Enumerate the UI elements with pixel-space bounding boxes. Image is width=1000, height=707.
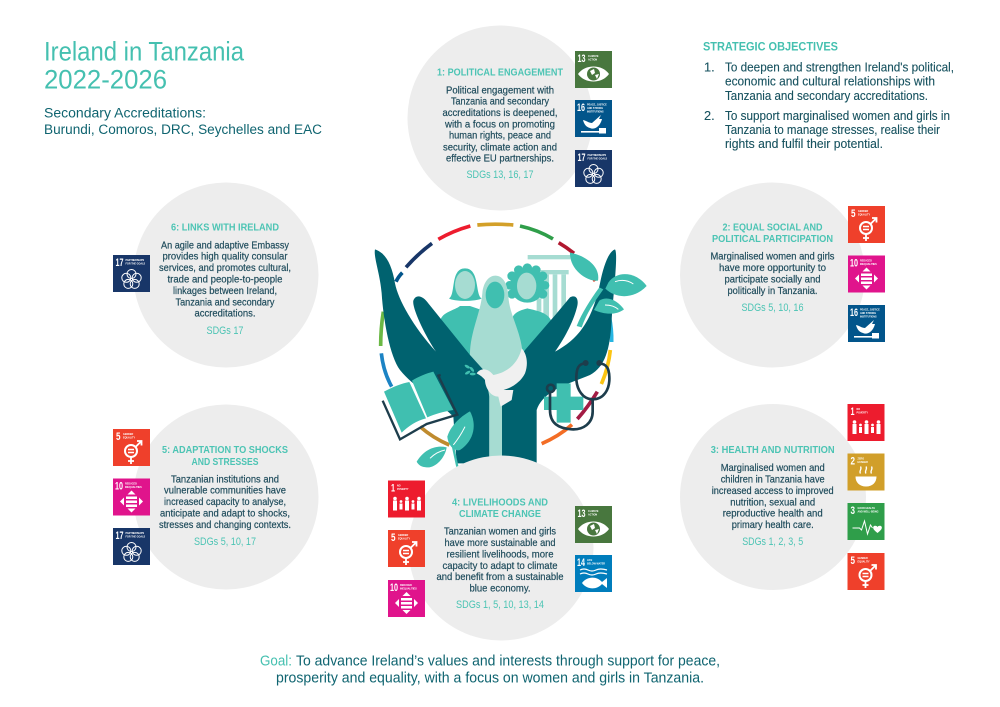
goal statement: prosperity and equality, with a focus on women and girls in Tanzania. xyxy=(276,671,704,687)
icon: SDG 16: 16 xyxy=(850,307,858,319)
objective 2: 2. xyxy=(704,108,715,123)
body text: children in Tanzania have xyxy=(721,474,825,486)
icon: SDG 10 xyxy=(113,478,150,516)
icon: SDG 10: INEQUALITIES xyxy=(125,486,142,489)
panel: 4 livelihoods and climate change xyxy=(408,456,594,640)
icon: SDG 17: PARTNERSHIPS xyxy=(126,259,144,262)
objective 1: 1. xyxy=(704,60,715,75)
body text: linkages between Ireland, xyxy=(173,286,277,297)
icon: SDG 1: POVERTY xyxy=(397,488,409,491)
plant right xyxy=(570,253,647,327)
icon: SDG 5: 5 xyxy=(116,431,120,443)
body text: vulnerable communities have xyxy=(164,486,286,497)
icon: SDG 17: PARTNERSHIPS xyxy=(126,532,144,535)
body text: provides high quality consular xyxy=(162,252,288,263)
heading: AND STRESSES xyxy=(192,457,259,468)
icon: SDG 5 xyxy=(848,553,884,590)
icon: SDG 14: LIFE xyxy=(587,559,593,562)
icon: SDG 10: INEQUALITIES xyxy=(400,588,417,590)
icon: SDG 5: 5 xyxy=(391,532,396,544)
heading xyxy=(452,498,548,520)
icon: SDG 1: POVERTY xyxy=(856,412,868,414)
body text: security, climate action and xyxy=(443,142,557,153)
stethoscope xyxy=(547,361,609,429)
SDG list: SDGs 1, 2, 3, 5 xyxy=(742,536,803,548)
objective 2: Tanzania to manage stresses, realise their xyxy=(725,122,941,137)
icon: SDG 13: ACTION xyxy=(588,58,597,62)
icon: SDG 16: 16 xyxy=(577,102,585,114)
icon: SDG 5: GENDER xyxy=(398,534,409,537)
body text xyxy=(710,252,834,297)
woman centre xyxy=(470,276,523,410)
objective 1: Tanzania and secondary accreditations. xyxy=(725,88,928,103)
body text xyxy=(159,240,291,320)
body text: accreditations is deepened, xyxy=(442,108,558,119)
icon: SDG 1: NO xyxy=(856,408,860,411)
icon: SDG 2: HUNGER xyxy=(858,461,868,464)
icon: SDG 3: AND WELL-BEING xyxy=(858,510,879,514)
icon: SDG 5 xyxy=(388,530,425,567)
SDG list: SDGs 5, 10, 16 xyxy=(742,302,804,314)
body text: trade and people-to-people xyxy=(168,274,283,286)
SDG list: SDGs 5, 10, 17 xyxy=(194,536,256,548)
icon: SDG 16: INSTITUTIONS xyxy=(860,316,877,318)
woman left xyxy=(441,268,485,355)
secondary accreditations: Secondary Accreditations: xyxy=(44,105,206,120)
body text: and benefit from a sustainable xyxy=(436,572,564,583)
objective 1 xyxy=(704,60,954,103)
icon: SDG 14 xyxy=(575,555,612,592)
icon: SDG 10: REDUCED xyxy=(400,584,412,587)
goal statement: Goal: xyxy=(260,654,292,670)
icon: SDG 17 xyxy=(113,255,150,292)
strategic objectives xyxy=(703,42,954,151)
icon: SDG 3 xyxy=(848,503,884,540)
icon: SDG 2: ZERO xyxy=(858,458,864,460)
body text xyxy=(436,527,564,595)
panel: 2 equal social and political participation xyxy=(680,182,865,368)
central illustration xyxy=(375,224,647,467)
title: Ireland in Tanzania xyxy=(44,37,245,67)
body text: Tanzania and secondary xyxy=(451,97,550,108)
heading xyxy=(162,445,288,468)
icon: SDG 3: 3 xyxy=(850,505,855,517)
icon: SDG 17: FOR THE GOALS xyxy=(126,536,146,538)
SDG list: SDGs 1, 5, 10, 13, 14 xyxy=(456,599,544,611)
title xyxy=(44,37,245,94)
body text: reproductive health and xyxy=(723,509,823,520)
objective 2: rights and fulfil their potential. xyxy=(725,136,883,151)
panel: 6 links with ireland xyxy=(134,182,318,368)
icon: SDG 10: 10 xyxy=(115,480,123,492)
icon: SDG 5: 5 xyxy=(851,208,856,220)
icon: SDG 17 xyxy=(113,528,150,565)
body text: increased capacity to analyse, xyxy=(164,497,286,508)
icon: SDG 17: FOR THE GOALS xyxy=(588,158,608,160)
body text: Marginalised women and girls xyxy=(710,252,834,263)
icon: SDG 16: PEACE, JUSTICE xyxy=(860,308,880,312)
icon: SDG 1: 1 xyxy=(850,406,854,418)
icon: SDG 14: BELOW WATER xyxy=(587,562,605,566)
icon: SDG 13: ACTION xyxy=(588,514,597,516)
objective 1: To deepen and strengthen Ireland's political, xyxy=(725,60,954,75)
body text xyxy=(159,474,291,531)
icon: SDG 16 xyxy=(848,305,885,342)
body text: An agile and adaptive Embassy xyxy=(161,240,290,251)
icon: SDG 5: GENDER xyxy=(123,433,134,436)
body text: have more opportunity to xyxy=(719,263,826,274)
icon: SDG 2 xyxy=(848,454,884,490)
secondary accreditations xyxy=(44,105,322,137)
hands xyxy=(375,249,616,463)
goal statement: To advance Ireland’s values and interests through support for peace, xyxy=(296,654,720,670)
icon: SDG 5: EQUALITY xyxy=(398,538,410,540)
icon: SDG 17: 17 xyxy=(116,257,124,269)
icon: SDG 13 xyxy=(575,51,612,88)
body text xyxy=(442,85,558,165)
heading: 5: ADAPTATION TO SHOCKS xyxy=(162,445,288,456)
SDG list: SDGs 17 xyxy=(206,325,244,337)
woman right xyxy=(505,263,552,352)
heading xyxy=(712,223,833,245)
icon: SDG 10: 10 xyxy=(850,258,858,270)
icon: SDG 1: 1 xyxy=(391,482,395,494)
body text: nutrition, sexual and xyxy=(730,497,815,508)
icon: SDG 5 xyxy=(113,429,150,466)
body text: effective EU partnerships. xyxy=(446,154,554,165)
heading: CLIMATE CHANGE xyxy=(459,509,541,520)
icon: SDG 5 xyxy=(848,206,885,243)
icon: SDG 5: 5 xyxy=(850,555,855,567)
icon: SDG 13: 13 xyxy=(578,508,586,520)
icon: SDG 16: AND STRONG xyxy=(587,107,603,110)
body text: human rights, peace and xyxy=(449,131,551,142)
body text: Political engagement with xyxy=(446,85,554,96)
panel: 5 adaptation to shocks and stresses xyxy=(134,404,318,590)
objective 2: To support marginalised women and girls in xyxy=(725,108,950,123)
body text: Marginalised women and xyxy=(721,463,825,474)
body text: accreditations. xyxy=(194,309,256,320)
body text xyxy=(712,463,834,531)
icon: SDG 16: AND STRONG xyxy=(860,312,876,315)
body text: have more sustainable and xyxy=(444,538,556,549)
SDG list: SDGs 13, 16, 17 xyxy=(466,169,534,181)
body text: primary health care. xyxy=(732,520,814,531)
title: 2022-2026 xyxy=(44,64,167,94)
icon: SDG 10 xyxy=(388,580,425,617)
icon: SDG 17: FOR THE GOALS xyxy=(126,262,146,266)
panel: 1 political engagement xyxy=(408,26,592,210)
body text: increased access to improved xyxy=(712,486,834,497)
icon: SDG 2: 2 xyxy=(850,456,855,468)
body text: with a focus on promoting xyxy=(444,119,555,130)
icon: SDG 3: GOOD HEALTH xyxy=(858,507,875,510)
pillar xyxy=(528,255,570,321)
icon: SDG 5: GENDER xyxy=(858,210,869,213)
heading: 4: LIVELIHOODS AND xyxy=(452,498,548,509)
icon: SDG 13 xyxy=(575,506,612,543)
objective 1: economic and cultural relationships with xyxy=(725,74,935,89)
icon: SDG 17: PARTNERSHIPS xyxy=(588,154,606,157)
objective 2 xyxy=(704,108,950,151)
icon: SDG 13: CLIMATE xyxy=(588,55,599,58)
heading: 1: POLITICAL ENGAGEMENT xyxy=(437,68,564,79)
body text: Tanzanian institutions and xyxy=(171,474,279,485)
strategic objectives heading: STRATEGIC OBJECTIVES xyxy=(703,42,838,54)
icon: SDG 10 xyxy=(848,256,885,292)
SDG colour ring xyxy=(381,224,612,445)
icon: SDG 14: 14 xyxy=(577,557,586,569)
icon: SDG 10: REDUCED xyxy=(860,260,872,262)
icon: SDG 16: INSTITUTIONS xyxy=(587,110,604,114)
icon: SDG 13: 13 xyxy=(578,53,586,65)
medical cross xyxy=(544,383,583,423)
icon: SDG 10: INEQUALITIES xyxy=(860,263,877,266)
plant left xyxy=(417,411,474,467)
body text: resilient livelihoods, more xyxy=(446,549,554,560)
icon: SDG 5: EQUALITY xyxy=(858,560,870,564)
body text: Tanzania and secondary xyxy=(176,297,275,308)
icon: SDG 16 xyxy=(575,100,612,137)
icon: SDG 1 xyxy=(848,404,884,441)
torso stripe xyxy=(489,395,502,458)
icon: SDG 17: 17 xyxy=(578,152,586,164)
goal statement xyxy=(260,654,720,687)
book xyxy=(383,372,457,439)
heading: POLITICAL PARTICIPATION xyxy=(712,234,833,245)
heading: 2: EQUAL SOCIAL AND xyxy=(722,223,822,234)
icon: SDG 16: PEACE, JUSTICE xyxy=(587,104,607,106)
body text: participate socially and xyxy=(724,274,821,286)
icon: SDG 10: REDUCED xyxy=(125,482,137,486)
body text: blue economy. xyxy=(470,584,530,595)
dove xyxy=(464,348,527,407)
icon: SDG 5: GENDER xyxy=(858,557,868,560)
icon: SDG 10: 10 xyxy=(390,582,398,594)
icon: SDG 5: EQUALITY xyxy=(858,214,870,216)
icon: SDG 17: 17 xyxy=(116,530,124,542)
body text: stresses and changing contexts. xyxy=(159,520,291,531)
icon: SDG 1 xyxy=(388,480,425,518)
body text: capacity to adapt to climate xyxy=(442,561,558,572)
heading: 6: LINKS WITH IRELAND xyxy=(171,223,279,234)
body text: anticipate and adapt to shocks, xyxy=(160,508,290,520)
icon: SDG 5: EQUALITY xyxy=(123,436,135,440)
secondary accreditations: Burundi, Comoros, DRC, Seychelles and EAC xyxy=(44,122,322,137)
icon: SDG 13: CLIMATE xyxy=(588,510,599,513)
body text: Tanzanian women and girls xyxy=(444,527,556,538)
icon: SDG 17 xyxy=(575,150,612,187)
panel: 3 health and nutrition xyxy=(680,404,866,590)
icon: SDG 1: NO xyxy=(397,484,401,488)
body text: services, and promotes cultural, xyxy=(159,263,291,274)
body text: politically in Tanzania. xyxy=(728,286,818,297)
heading: 3: HEALTH AND NUTRITION xyxy=(711,445,835,456)
